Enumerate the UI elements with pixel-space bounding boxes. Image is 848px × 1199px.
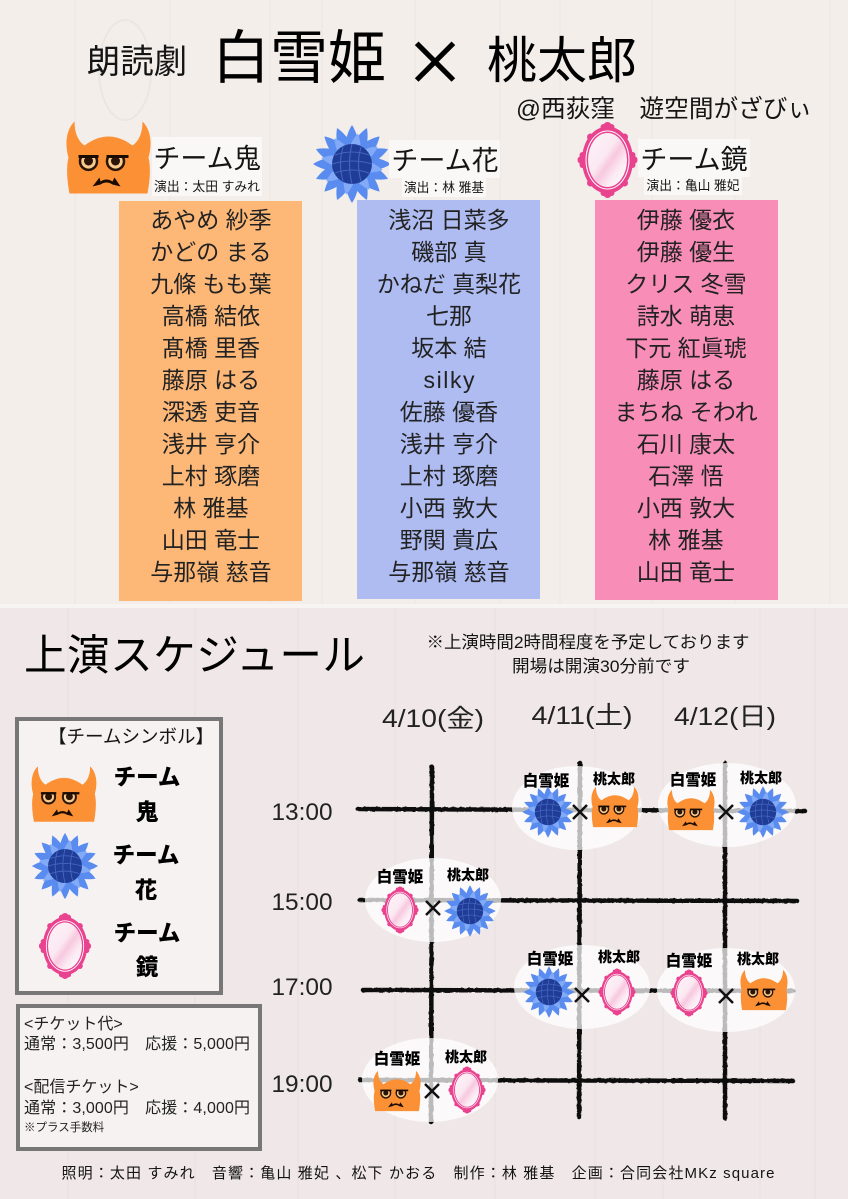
- slot: 4/12 17:00: 桃太郎: [737, 951, 779, 967]
- cast list: 石澤 悟: [648, 463, 724, 489]
- cast list: 浅沼 日菜多: [388, 207, 510, 233]
- time labels: 13:00: [271, 799, 333, 826]
- panel: team oni: [66, 122, 302, 601]
- panel: team mirror: [578, 122, 778, 600]
- slot: 4/11 17:00: [514, 945, 650, 1029]
- team name: チーム鏡: [640, 145, 748, 175]
- cast list: 浅井 亨介: [400, 431, 498, 457]
- slot: 4/10 19:00: 白雪姫: [374, 1049, 421, 1068]
- legend: flower: 花: [135, 878, 157, 903]
- cast list: 山田 竜士: [637, 559, 735, 585]
- title: 朗読劇: [87, 44, 187, 81]
- cast list: 石川 康太: [637, 431, 735, 457]
- panel: ticket prices: <配信チケット>: [24, 1078, 139, 1096]
- legend: mirror: 鏡: [136, 955, 159, 980]
- date headers: [382, 702, 776, 733]
- cast list: 九條 もも葉: [150, 271, 272, 297]
- cast list: [595, 200, 778, 600]
- slot: 4/11 13:00: 白雪姫: [523, 771, 570, 790]
- cast list: 七那: [426, 303, 472, 329]
- legend: oni: [32, 765, 180, 825]
- cast list: 小西 敦大: [637, 495, 735, 521]
- slot: 4/12 13:00: 白雪姫: [670, 770, 717, 789]
- slot: 4/10 15:00: 桃太郎: [447, 867, 489, 883]
- cast list: かねだ 真梨花: [377, 271, 521, 297]
- cast list: 下元 紅眞琥: [625, 335, 747, 361]
- legend: flower: [32, 833, 179, 903]
- cast list: 髙橋 里香: [162, 335, 260, 361]
- slot: 4/11 13:00: 桃太郎: [593, 771, 635, 787]
- legend: mirror: チーム: [114, 921, 180, 946]
- title: 白雪姫: [212, 26, 386, 91]
- cast list: 藤原 はる: [637, 367, 735, 393]
- cast list: あやめ 紗季: [150, 207, 272, 233]
- cast list: 坂本 結: [411, 335, 487, 361]
- cast list: 伊藤 優衣: [637, 207, 735, 233]
- director: 演出：太田 すみれ: [154, 179, 260, 194]
- slot: 4/10 15:00: 白雪姫: [377, 867, 424, 886]
- cast list: 磯部 真: [411, 239, 487, 265]
- schedule note: 開場は開演30分前です: [512, 657, 690, 676]
- time labels: 15:00: [271, 889, 333, 916]
- slot: 4/12 13:00: [658, 763, 796, 847]
- cast list: 与那嶺 慈音: [388, 559, 510, 585]
- legend heading: 【チームシンボル】: [48, 726, 214, 747]
- cast list: 山田 竜士: [162, 527, 260, 553]
- cast list: 高橋 結依: [162, 303, 260, 329]
- date headers: 4/10(金): [382, 705, 484, 733]
- panel: ticket prices: [18, 1006, 260, 1149]
- slot: 4/10 19:00: [362, 1038, 498, 1122]
- slot: 4/12 13:00: 桃太郎: [740, 770, 782, 786]
- cast list: 上村 琢磨: [400, 463, 498, 489]
- panel: ticket prices: <チケット代>: [24, 1015, 123, 1033]
- slot: 4/11 17:00: 桃太郎: [598, 949, 640, 965]
- cast list: 深透 吏音: [162, 399, 260, 425]
- cast list: 佐藤 優香: [400, 399, 498, 425]
- panel: ticket prices: 通常：3,000円 応援：4,000円: [24, 1099, 250, 1117]
- cast list: 小西 敦大: [400, 495, 498, 521]
- time labels: 17:00: [271, 974, 333, 1001]
- cast list: 詩水 萌恵: [637, 303, 735, 329]
- cast list: 林 雅基: [648, 527, 724, 553]
- legend: oni: 鬼: [136, 799, 159, 825]
- title: ×: [404, 13, 466, 103]
- cast list: [357, 200, 540, 599]
- cast list: クリス 冬雪: [625, 271, 747, 297]
- cast list: 藤原 はる: [162, 367, 260, 393]
- slot: 4/12 17:00: 白雪姫: [666, 951, 713, 970]
- panel: ticket prices: 通常：3,500円 応援：5,000円: [24, 1035, 250, 1053]
- slot: 4/10 19:00: 桃太郎: [445, 1049, 487, 1065]
- schedule heading: 上演スケジュール: [24, 632, 365, 680]
- cast list: [119, 201, 302, 601]
- cast list: 上村 琢磨: [162, 463, 260, 489]
- team name: チーム花: [391, 146, 499, 176]
- date headers: 4/12(日): [674, 703, 776, 731]
- cast list: 林 雅基: [173, 495, 249, 521]
- icon: oni: [66, 122, 151, 194]
- icon: mirror: [578, 122, 638, 198]
- schedule grid: [358, 763, 805, 1122]
- cast list: 伊藤 優生: [637, 239, 735, 265]
- cast list: 浅井 亨介: [162, 431, 260, 457]
- slot: 4/11 17:00: 白雪姫: [527, 949, 574, 968]
- cast list: silky: [424, 367, 475, 393]
- panel: ticket prices: ※プラス手数料: [24, 1120, 105, 1134]
- legend: oni: チーム: [114, 765, 180, 790]
- slot: 4/12 17:00: [657, 948, 795, 1032]
- icon: flower: [313, 125, 391, 203]
- title: [87, 13, 637, 103]
- director: 演出：亀山 雅妃: [646, 178, 740, 193]
- cast list: かどの まる: [150, 239, 272, 265]
- slot: 4/10 15:00: [365, 858, 501, 942]
- footer credits: 照明：太田 すみれ 音響：亀山 雅妃 、松下 かおる 制作：林 雅基 企画：合同会社MKz square: [62, 1165, 774, 1182]
- schedule note: ※上演時間2時間程度を予定しております: [426, 633, 750, 652]
- panel: team symbol legend: [17, 719, 221, 993]
- legend: flower: チーム: [113, 843, 179, 868]
- team name: チーム鬼: [153, 144, 261, 174]
- venue: @西荻窪 遊空間がざびぃ: [516, 94, 812, 123]
- cast list: まちね そわれ: [614, 399, 758, 425]
- time labels: 19:00: [271, 1071, 333, 1098]
- panel: team flower: [313, 125, 540, 599]
- cast list: 与那嶺 慈音: [150, 559, 272, 585]
- legend: mirror: [39, 913, 180, 980]
- slot: 4/11 13:00: [512, 766, 642, 850]
- director: 演出：林 雅基: [404, 180, 484, 195]
- schedule note: [426, 633, 750, 676]
- time labels: [271, 799, 333, 1098]
- cast list: 野関 貴広: [400, 527, 498, 553]
- date headers: 4/11(土): [532, 702, 632, 730]
- title: 桃太郎: [487, 33, 637, 89]
